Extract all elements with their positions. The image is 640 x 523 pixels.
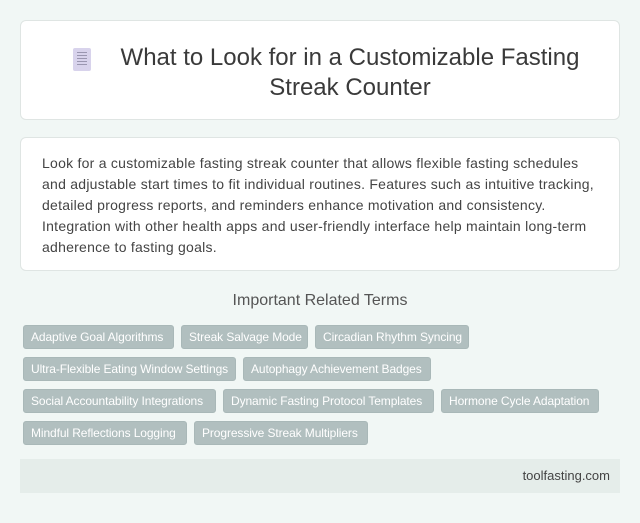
tags: Ultra-Flexible Eating Window Settings — [31, 362, 228, 376]
footer — [20, 459, 620, 493]
section heading: Important Related Terms — [233, 292, 407, 309]
description text: Integration with other health apps and user-friendly interface help maintain long-term — [42, 218, 586, 234]
icon: document — [73, 48, 91, 71]
footer: toolfasting.com — [523, 468, 610, 483]
description text: detailed progress reports, and reminders enhance motivation and consistency. — [42, 197, 546, 213]
tags: Progressive Streak Multipliers — [202, 426, 358, 440]
description text: Look for a customizable fasting streak counter that allows flexible fasting schedules — [42, 155, 578, 171]
tags: Social Accountability Integrations — [31, 394, 203, 408]
tags: Autophagy Achievement Badges — [251, 362, 422, 376]
description text: and adjustable start times to fit individual routines. Features such as intuitive tracking, — [42, 176, 594, 192]
tags: Adaptive Goal Algorithms — [31, 330, 163, 344]
title: Streak Counter — [269, 74, 431, 101]
tags: Dynamic Fasting Protocol Templates — [231, 394, 422, 408]
title card — [20, 20, 620, 120]
description card — [20, 137, 620, 271]
tags: Circadian Rhythm Syncing — [323, 330, 462, 344]
description text: adherence to fasting goals. — [42, 239, 217, 255]
tags: Hormone Cycle Adaptation — [449, 394, 589, 408]
tags: Mindful Reflections Logging — [31, 426, 176, 440]
title: What to Look for in a Customizable Fasting — [121, 44, 579, 71]
title — [120, 44, 579, 101]
description text — [42, 155, 594, 255]
tags: Streak Salvage Mode — [189, 330, 302, 344]
